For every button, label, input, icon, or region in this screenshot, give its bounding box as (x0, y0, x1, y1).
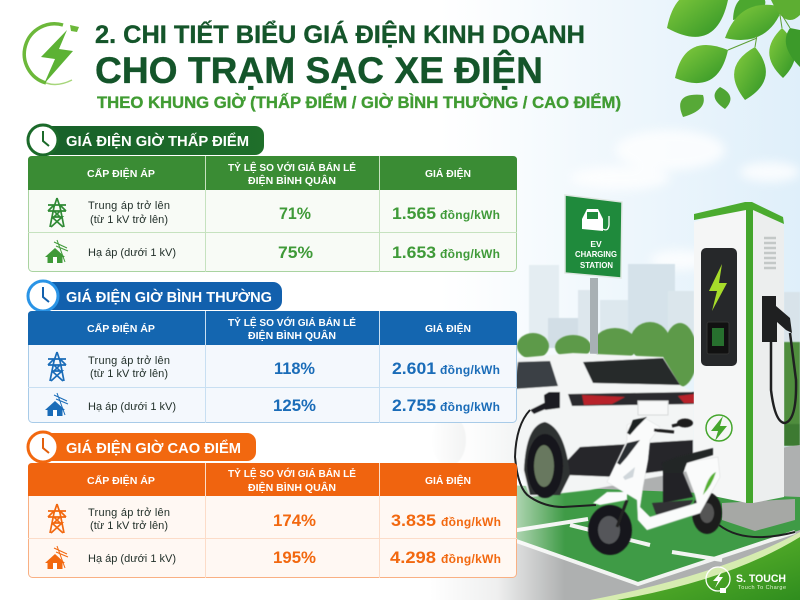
vent grille (764, 238, 776, 268)
ground fade (430, 480, 565, 600)
table: peak: 4.298 (390, 548, 436, 567)
heading: normal hours (28, 281, 282, 311)
heading: off-peak: GIÁ ĐIỆN GIỜ THẤP ĐIỂM (66, 132, 249, 150)
table: off-peak: (từ 1 kV trở lên) (90, 214, 168, 226)
heading: peak: GIÁ ĐIỆN GIỜ CAO ĐIỂM (66, 439, 241, 457)
table: peak: đồng/kWh (441, 552, 501, 566)
heading: peak (28, 432, 256, 462)
table: off-peak: ĐIỆN BÌNH QUÂN (248, 174, 336, 187)
table: normal hours: 118% (274, 359, 315, 378)
trees (517, 322, 800, 446)
scooter (588, 417, 722, 555)
brand logo: S. TOUCH (706, 567, 786, 593)
icon: house (45, 393, 68, 416)
icon: transmission tower (48, 352, 66, 381)
table: off-peak: 71% (279, 204, 311, 223)
table: peak: 195% (273, 548, 316, 567)
fade over car front (430, 340, 515, 500)
icon: house (45, 546, 68, 569)
table: peak: 3.835 (391, 511, 436, 530)
table: normal hours: TỶ LỆ SO VỚI GIÁ BÁN LẺ (228, 316, 356, 329)
table: peak: ĐIỆN BÌNH QUÂN (248, 481, 336, 494)
table: peak (28, 463, 517, 578)
table: normal hours: (từ 1 kV trở lên) (90, 368, 168, 380)
table: off-peak: 75% (278, 243, 313, 262)
panel: off-peak prices (28, 125, 517, 272)
table: off-peak: đồng/kWh (440, 247, 500, 261)
icon: transmission tower (48, 198, 66, 227)
table: off-peak: CẤP ĐIỆN ÁP (87, 167, 155, 180)
table: off-peak: đồng/kWh (440, 208, 500, 222)
brand logo: S. TOUCH: S. TOUCH (736, 573, 786, 585)
charger (694, 202, 796, 537)
scene: EV charging station (430, 130, 800, 600)
charging sign: EV (590, 239, 602, 249)
table: normal hours: đồng/kWh (440, 363, 500, 377)
table: normal hours: 2.601 (392, 359, 436, 378)
green swoosh corner (590, 532, 800, 600)
logo: lightning bolt in ring (24, 24, 79, 84)
title: 2. CHI TIẾT BIỂU GIÁ ĐIỆN KINH DOANH (95, 19, 585, 49)
table: off-peak: TỶ LỆ SO VỚI GIÁ BÁN LẺ (228, 161, 356, 174)
table: normal hours: đồng/kWh (440, 400, 500, 414)
table: normal hours: 2.755 (392, 396, 436, 415)
icon: house (45, 240, 68, 263)
table: normal hours (28, 311, 517, 423)
holster (762, 296, 792, 342)
table: normal hours: Trung áp trở lên (88, 355, 170, 367)
heading: off-peak (28, 125, 264, 155)
sign car icon (582, 209, 609, 231)
table: off-peak: Trung áp trở lên (88, 200, 170, 212)
ground and parking bay (430, 445, 800, 600)
table: peak: 174% (273, 511, 316, 530)
title: CHO TRẠM SẠC XE ĐIỆN (95, 49, 543, 91)
table: off-peak: GIÁ ĐIỆN (425, 167, 471, 180)
table: off-peak (28, 156, 517, 272)
charging sign (565, 195, 622, 354)
panel: peak prices (28, 432, 517, 578)
table: normal hours: GIÁ ĐIỆN (425, 322, 471, 335)
table: normal hours: CẤP ĐIỆN ÁP (87, 322, 155, 335)
charging cable to car (515, 410, 596, 507)
charging sign: STATION (580, 260, 613, 270)
table: normal hours: Hạ áp (dưới 1 kV) (88, 401, 176, 413)
leaves top right (667, 0, 800, 117)
table: peak: (từ 1 kV trở lên) (90, 520, 168, 532)
icon: transmission tower (48, 504, 66, 533)
brand logo: S. TOUCH: Touch To Charge (738, 585, 786, 591)
table: off-peak: 1.653 (392, 243, 436, 262)
table: peak: GIÁ ĐIỆN (425, 474, 471, 487)
panel: normal-hour prices (28, 281, 517, 423)
table: peak: CẤP ĐIỆN ÁP (87, 474, 155, 487)
charging sign: CHARGING (575, 249, 617, 259)
table: peak: Hạ áp (dưới 1 kV) (88, 553, 176, 565)
title: THEO KHUNG GIỜ (THẤP ĐIỂM / GIỜ BÌNH THƯỜNG / CAO ĐIỂM) (97, 93, 621, 112)
heading: normal hours: GIÁ ĐIỆN GIỜ BÌNH THƯỜNG (66, 288, 272, 306)
car (432, 353, 694, 498)
table: peak: đồng/kWh (441, 515, 501, 529)
table: normal hours: ĐIỆN BÌNH QUÂN (248, 329, 336, 342)
table: off-peak: 1.565 (392, 204, 436, 223)
table: normal hours: 125% (273, 396, 316, 415)
clouds (570, 130, 800, 270)
table: peak: Trung áp trở lên (88, 507, 170, 519)
city buildings (529, 264, 800, 348)
table: off-peak: Hạ áp (dưới 1 kV) (88, 247, 176, 259)
title (95, 19, 621, 112)
scooter body (607, 417, 720, 530)
table: peak: TỶ LỆ SO VỚI GIÁ BÁN LẺ (228, 467, 356, 480)
